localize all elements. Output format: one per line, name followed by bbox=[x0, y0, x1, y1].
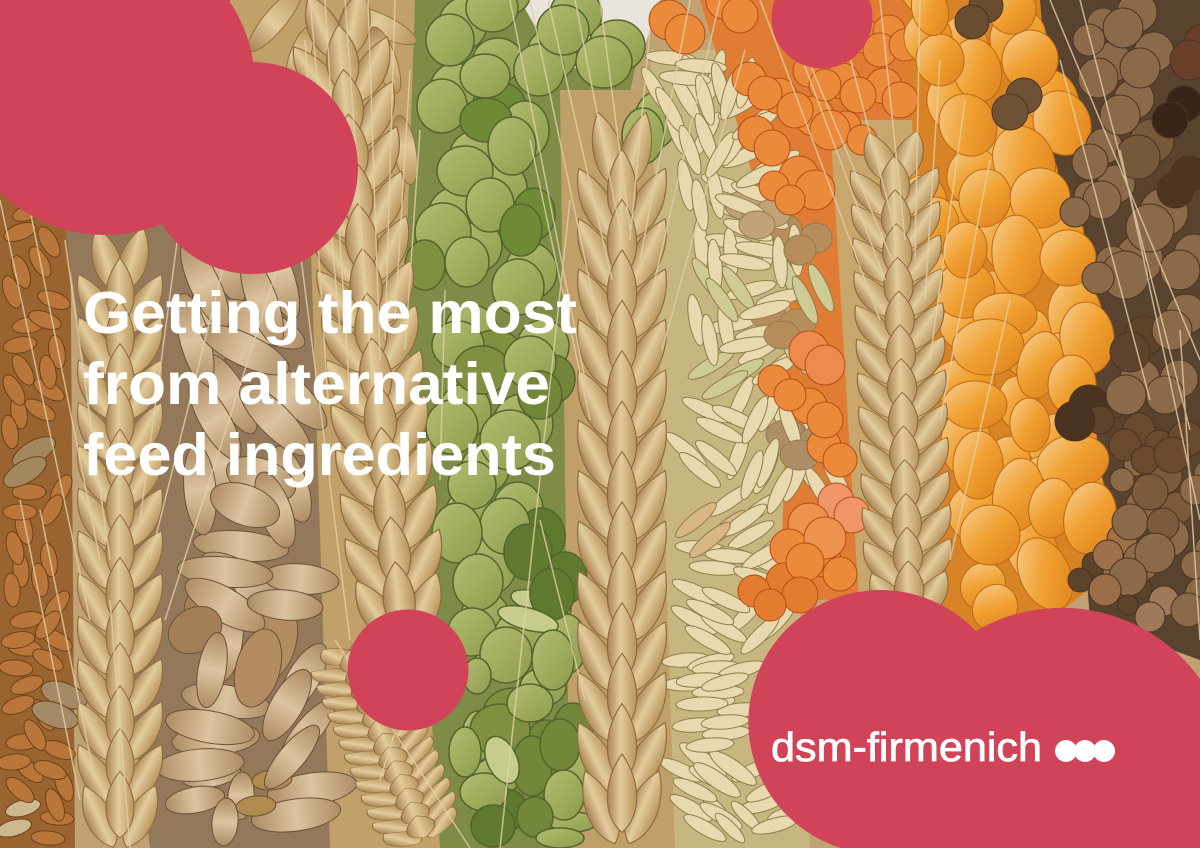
red circle lower middle bbox=[348, 610, 468, 730]
sunflower seeds underlayer bbox=[171, 209, 359, 821]
sunflower seeds bbox=[155, 235, 343, 847]
green peas underlayer bbox=[418, 0, 677, 832]
rice grains bbox=[651, 68, 839, 846]
red lentils underlayer bbox=[649, 0, 966, 607]
wheat ear centre bbox=[565, 109, 679, 848]
rice underlayer bbox=[637, 48, 825, 826]
logo: dsm-firmenich: dsm-firmenich bbox=[771, 724, 1042, 770]
brown lentils underlayer bbox=[969, 0, 1200, 616]
maize kernels bbox=[906, 0, 1122, 640]
title: feed ingredients bbox=[83, 422, 556, 488]
rice underlayer two bbox=[667, 56, 855, 834]
wheat ears bbox=[66, 0, 967, 848]
green split peas bbox=[405, 0, 664, 848]
wheat ear middle left bbox=[274, 0, 465, 653]
red circle top bbox=[772, 0, 872, 68]
red blob top left bbox=[0, 0, 358, 274]
title: Getting the most bbox=[83, 280, 577, 346]
title bbox=[83, 280, 577, 488]
red blob bottom right bbox=[748, 590, 1200, 848]
logo dots bbox=[1055, 740, 1115, 762]
flax seeds underlayer bbox=[4, 199, 91, 826]
title: from alternative bbox=[83, 351, 550, 417]
barley grains upper bbox=[241, 0, 422, 186]
wheat ear lower bbox=[292, 619, 479, 848]
flax seeds bbox=[0, 219, 82, 846]
wheat ear right bbox=[836, 127, 967, 627]
wheat ear left bbox=[66, 224, 174, 848]
brown lentils bbox=[955, 5, 1200, 632]
maize underlayer bbox=[894, 0, 1110, 618]
red lentils bbox=[665, 0, 982, 621]
